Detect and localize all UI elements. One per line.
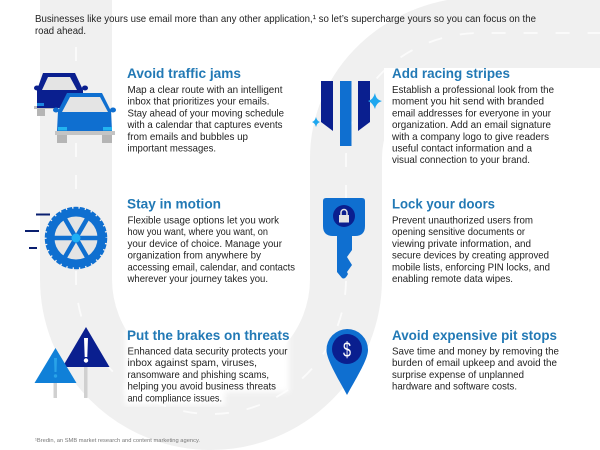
text: Add racing stripes: useful contact information and a: [392, 144, 532, 154]
text: Avoid expensive pit stops: [392, 346, 559, 393]
text: Put the brakes on threats: ransomware and phishing scams,: [128, 370, 269, 381]
text: Avoid expensive pit stops: hardware and software costs.: [392, 382, 517, 393]
text: Avoid traffic jams: [127, 85, 284, 154]
intro text: [35, 14, 536, 37]
text: Put the brakes on threats: inbox against spam, viruses,: [128, 358, 257, 369]
text: Add racing stripes: visual connection to your brand.: [392, 155, 530, 166]
text: Put the brakes on threats: and compliance issues.: [128, 393, 222, 404]
text: Put the brakes on threats: helping you avoid business threats: [128, 382, 276, 393]
text: Add racing stripes: [391, 85, 554, 166]
text: Lock your doors: mobile lists, enforcing PIN locks, and: [392, 262, 550, 273]
text: Stay in motion: Flexible usage options let you work: [128, 216, 280, 226]
intro text: road ahead.: [35, 26, 86, 37]
text: Avoid traffic jams: with a calendar that captures events: [127, 120, 282, 131]
text: Add racing stripes: Establish a professional look from the: [392, 85, 554, 96]
icon: wheel: [25, 208, 106, 268]
text: Avoid expensive pit stops: burden of email upkeep and avoid the: [392, 358, 557, 369]
heading: Put the brakes on threats: Put the brakes on threats: [127, 327, 290, 343]
text: Avoid traffic jams: inbox that prioritizes your emails.: [128, 97, 270, 108]
text: Stay in motion: how you want, where you want, on: [128, 227, 268, 238]
text: Add racing stripes: email addresses for everyone in your: [392, 108, 552, 119]
text: Lock your doors: Prevent unauthorized users from: [392, 216, 533, 226]
text: Lock your doors: viewing private information, and: [392, 239, 531, 250]
footnote: ¹Bredin, an SMB market research and content marketing agency.: [35, 438, 200, 444]
text: Lock your doors: enabling remote data wipes.: [392, 274, 513, 285]
text: Stay in motion: wherever your journey takes you.: [127, 274, 268, 285]
text: Stay in motion: accessing email, calendar, and contacts: [128, 262, 295, 273]
text: Put the brakes on threats: Enhanced data security protects your: [128, 346, 288, 358]
icon: key: [323, 198, 365, 278]
text: Put the brakes on threats: [128, 346, 288, 404]
heading: Avoid traffic jams: Avoid traffic jams: [127, 65, 241, 81]
text: Avoid traffic jams: Stay ahead of your moving schedule: [128, 108, 284, 119]
text: Lock your doors: secure devices by creating approved: [392, 251, 549, 262]
text: Stay in motion: your device of choice. Manage your: [128, 239, 283, 250]
text: Add racing stripes: moment you hit send with branded: [392, 97, 544, 108]
text: Avoid traffic jams: Map a clear route with an intelligent: [128, 85, 283, 96]
intro text: Businesses like yours use email more than any other application,¹ so let’s supercharge yours so you can focus on the: [35, 14, 536, 25]
text: Add racing stripes: organization. Add an email signature: [392, 120, 551, 131]
icon: map pin: $: [343, 339, 351, 362]
icon: map pin: [326, 329, 368, 395]
text: Lock your doors: opening sensitive documents or: [392, 227, 526, 238]
icon: two cars: [34, 73, 116, 143]
text: Avoid expensive pit stops: Save time and money by removing the: [392, 346, 559, 358]
text: Stay in motion: [127, 216, 295, 285]
icon: warning signs: [34, 327, 110, 398]
heading: Stay in motion: Stay in motion: [127, 196, 221, 212]
text: Avoid traffic jams: from emails and bubbles up: [128, 132, 248, 143]
text: Stay in motion: organization from anywhere by: [128, 251, 262, 262]
text: Add racing stripes: with a company logo to give readers: [391, 132, 549, 143]
icon: racing stripes: [312, 81, 382, 146]
text: Lock your doors: [392, 216, 550, 285]
heading: Add racing stripes: Add racing stripes: [392, 65, 510, 81]
heading: Lock your doors: Lock your doors: [392, 196, 495, 212]
text: Avoid expensive pit stops: surprise expense of unplanned: [392, 370, 524, 381]
text: Avoid traffic jams: important messages.: [128, 144, 216, 154]
heading: Avoid expensive pit stops: Avoid expensive pit stops: [392, 327, 557, 343]
